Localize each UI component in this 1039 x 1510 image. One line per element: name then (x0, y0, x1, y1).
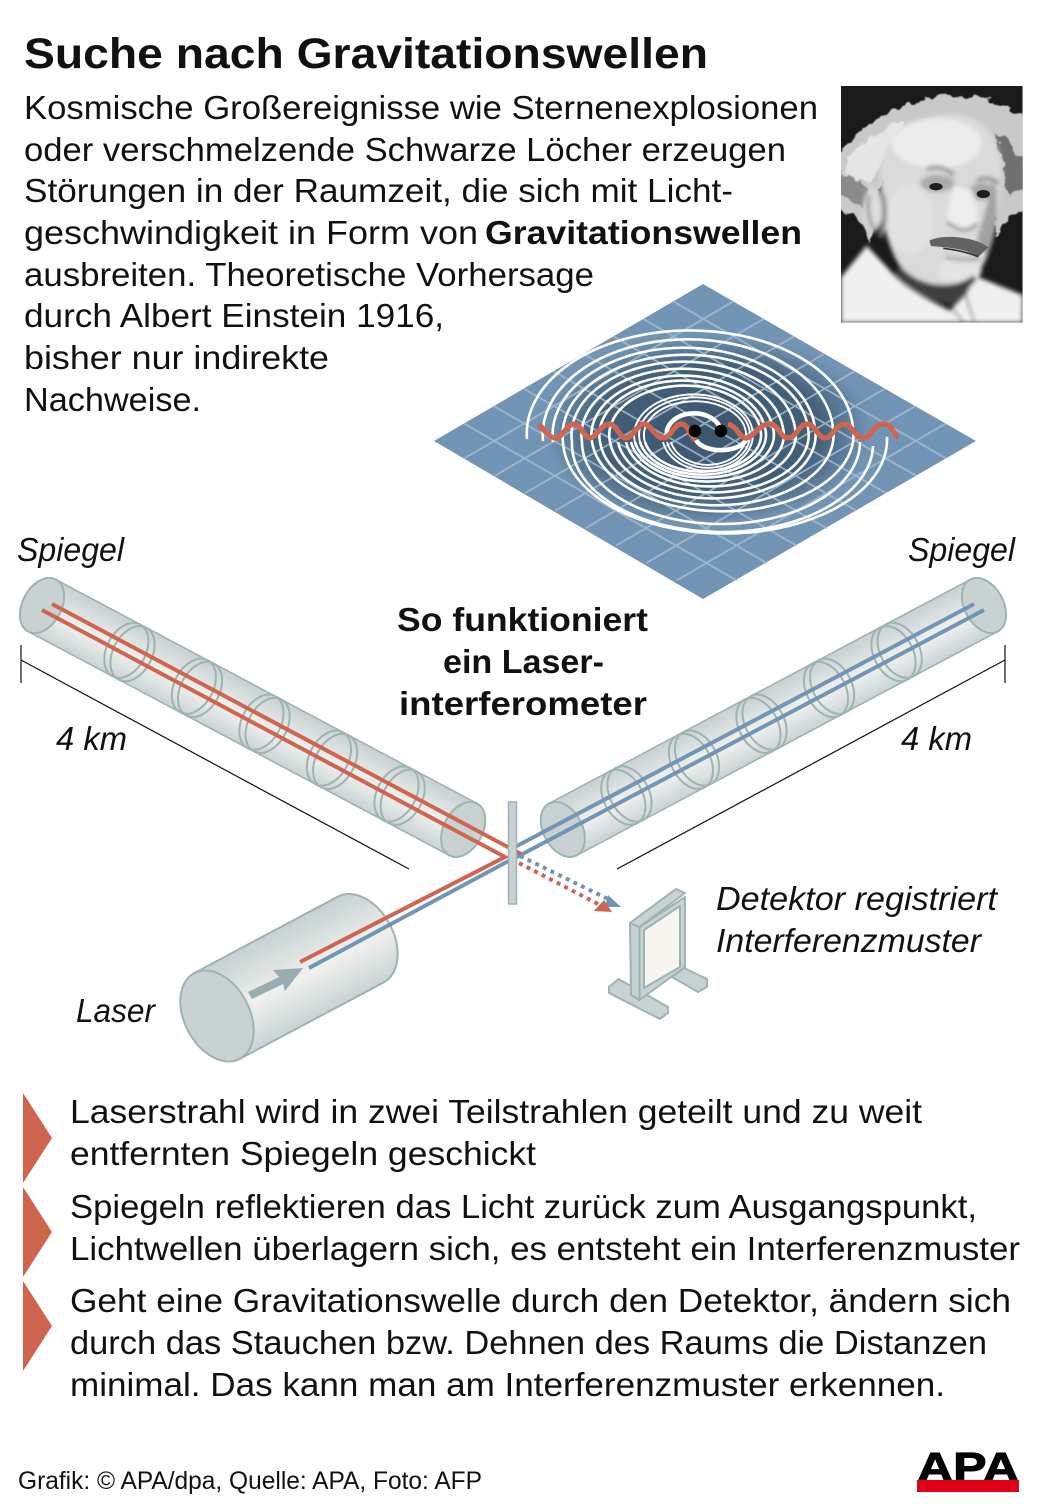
heading: laser interferometer: ein Laser- (443, 643, 604, 680)
dimension line left (21, 645, 409, 869)
spiral waves: upper arcs (527, 330, 853, 442)
spiral waves: lower arcs (563, 428, 887, 533)
right vacuum tube (532, 570, 1015, 865)
heading: laser interferometer: interferometer (399, 685, 647, 722)
spiral waves: tight inner band (634, 394, 753, 471)
logo: APA: APA (917, 1444, 1019, 1490)
laser arrow (248, 968, 303, 999)
intro text block: geschwindigkeit in Form von (24, 214, 478, 251)
intro text block: Nachweise. (24, 381, 201, 418)
black holes (689, 425, 727, 437)
intro text block: durch Albert Einstein 1916, (24, 297, 444, 334)
arrow heads (594, 895, 621, 912)
dotted output beams (520, 856, 608, 899)
detector (609, 889, 707, 1019)
intro text block (24, 89, 818, 418)
red wave left (539, 424, 695, 440)
red wave right (728, 424, 898, 438)
intro text block: bisher nur indirekte (24, 339, 329, 376)
intro text block: Gravitationswellen (485, 214, 802, 251)
intro text block: oder verschmelzende Schwarze Löcher erzeugen (24, 131, 786, 168)
label: Laser: Laser (76, 992, 157, 1029)
step 3: Geht eine Gravitationswelle durch den Detektor, ändern sich (70, 1282, 1011, 1319)
step 1 (23, 1093, 922, 1183)
spacetime plane (434, 284, 976, 599)
heading: laser interferometer (397, 601, 648, 722)
left vacuum tube (11, 570, 494, 865)
label: detector: Interferenzmuster (716, 922, 983, 959)
step 1: Laserstrahl wird in zwei Teilstrahlen geteilt und zu weit (70, 1093, 922, 1130)
label: Spiegel left: Spiegel (17, 531, 126, 568)
label: 4 km left: 4 km (56, 720, 127, 757)
beam splitter (508, 802, 516, 904)
step 2: Spiegeln reflektieren das Licht zurück zum Ausgangspunkt, (70, 1188, 977, 1225)
title: Suche nach Gravitationswellen (24, 30, 708, 78)
laser cylinder (165, 881, 412, 1074)
inner spiral core (667, 413, 747, 450)
step 1: entfernten Spiegeln geschickt (70, 1135, 536, 1172)
central depression (536, 330, 880, 530)
dimension line right (617, 645, 1005, 869)
beams (42, 604, 984, 968)
intro text block: Kosmische Großereignisse wie Sternenexplosionen (24, 89, 818, 126)
diagram: spacetime grid with gravitational waves (434, 284, 976, 599)
photo: Albert Einstein (833, 86, 1030, 323)
intro text block: Störungen in der Raumzeit, die sich mit Licht- (24, 172, 733, 209)
label: detector: Detektor registriert (716, 880, 999, 917)
step 3: durch das Stauchen bzw. Dehnen des Raums die Distanzen (70, 1324, 987, 1361)
label: detector (716, 880, 999, 959)
heading: laser interferometer: So funktioniert (397, 601, 648, 638)
intro text block: ausbreiten. Theoretische Vorhersage (24, 256, 594, 293)
step 2 (23, 1187, 1020, 1277)
source credit: Grafik: © APA/dpa, Quelle: APA, Foto: AFP (18, 1467, 482, 1495)
step 3 (23, 1281, 1011, 1403)
step 3: minimal. Das kann man am Interferenzmuster erkennen. (70, 1366, 945, 1403)
label: Spiegel right: Spiegel (908, 531, 1017, 568)
step 2: Lichtwellen überlagern sich, es entsteht ein Interferenzmuster (70, 1230, 1020, 1267)
label: 4 km right: 4 km (901, 720, 972, 757)
